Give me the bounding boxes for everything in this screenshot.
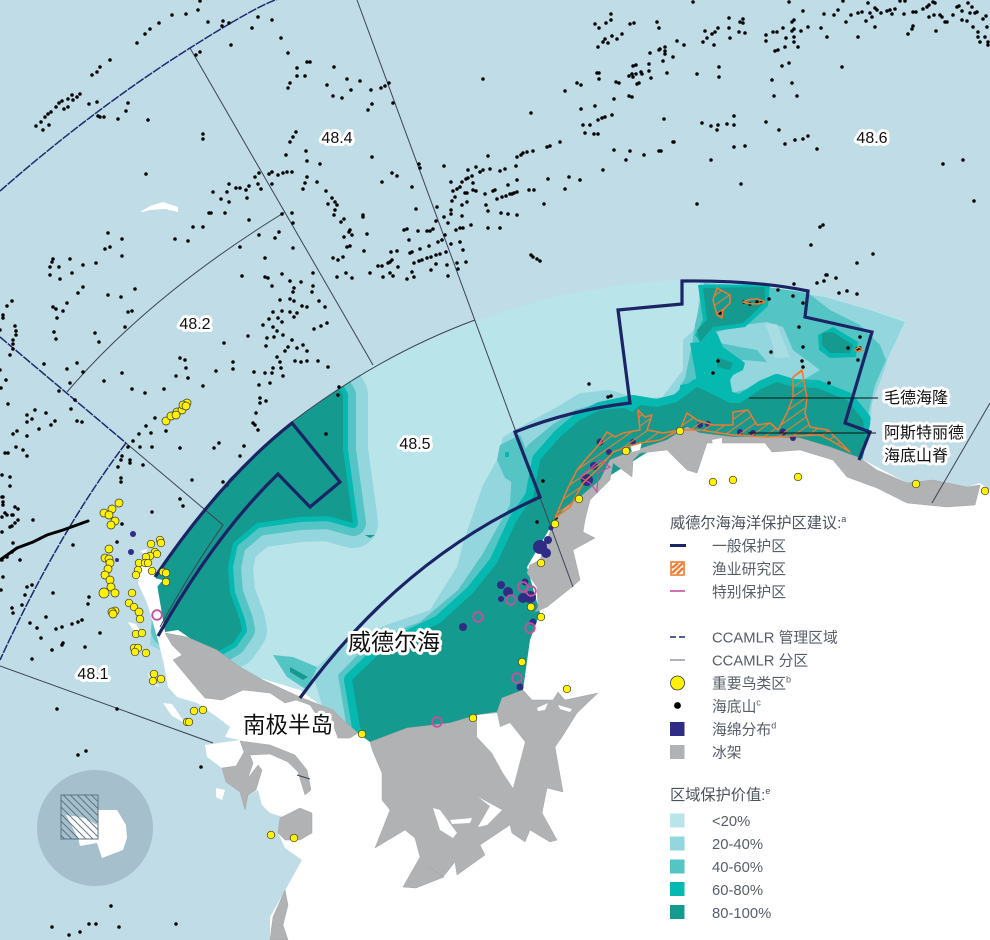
special protection zone (580, 460, 610, 492)
legend: 海绵分布 (712, 722, 771, 738)
subarea number labels (77, 130, 888, 683)
place labels: 毛德海隆 (884, 384, 948, 408)
legend: CCAMLR 分区 (712, 652, 808, 670)
legend: b (786, 674, 791, 684)
CCAMLR management area lines (0, 0, 287, 660)
subarea number labels: 48.4 (321, 130, 353, 147)
legend: 20-40% (712, 837, 763, 853)
place labels: 南极半岛 (243, 708, 333, 740)
legend: c (756, 698, 761, 708)
legend (670, 514, 846, 922)
islands (128, 202, 225, 800)
fishery research zone (555, 288, 862, 518)
legend: CCAMLR 管理区域 (712, 630, 838, 646)
legend: e (765, 786, 770, 796)
subarea number labels: 48.2 (179, 316, 211, 333)
Antarctic continent and peninsula (138, 437, 990, 940)
legend: 特别保护区 (712, 584, 786, 601)
legend: d (771, 720, 776, 730)
subarea number labels: 48.6 (856, 130, 888, 147)
legend: a (841, 514, 846, 524)
legend: 重要鸟类区 (712, 676, 786, 692)
legend: 海底山 (712, 700, 756, 716)
ice shelves (165, 427, 980, 940)
subarea number labels: 48.1 (77, 666, 109, 683)
legend: 威德尔海海洋保护区建议: (670, 515, 841, 532)
subarea number labels: 48.5 (399, 436, 431, 453)
legend: <20% (712, 814, 750, 830)
legend: 冰架 (712, 744, 742, 762)
inset locator globe (37, 770, 153, 886)
leader lines (748, 398, 878, 433)
special area rings (152, 582, 536, 727)
legend: 80-100% (712, 906, 771, 922)
place labels (243, 384, 964, 740)
legend: 一般保护区 (712, 538, 786, 555)
place labels: 海底山脊 (884, 442, 948, 466)
legend: 40-60% (712, 860, 763, 876)
general protection zone outlines (155, 281, 872, 698)
place labels: 阿斯特丽德 (884, 419, 964, 443)
legend: 60-80% (712, 883, 763, 899)
sponge distribution (115, 421, 796, 690)
legend: 区域保护价值: (670, 787, 765, 804)
important bird areas (99, 399, 989, 842)
conservation value map layers (150, 279, 908, 755)
legend: 渔业研究区 (712, 561, 786, 578)
seamount chain (0, 521, 88, 560)
place labels: 威德尔海 (348, 623, 440, 657)
